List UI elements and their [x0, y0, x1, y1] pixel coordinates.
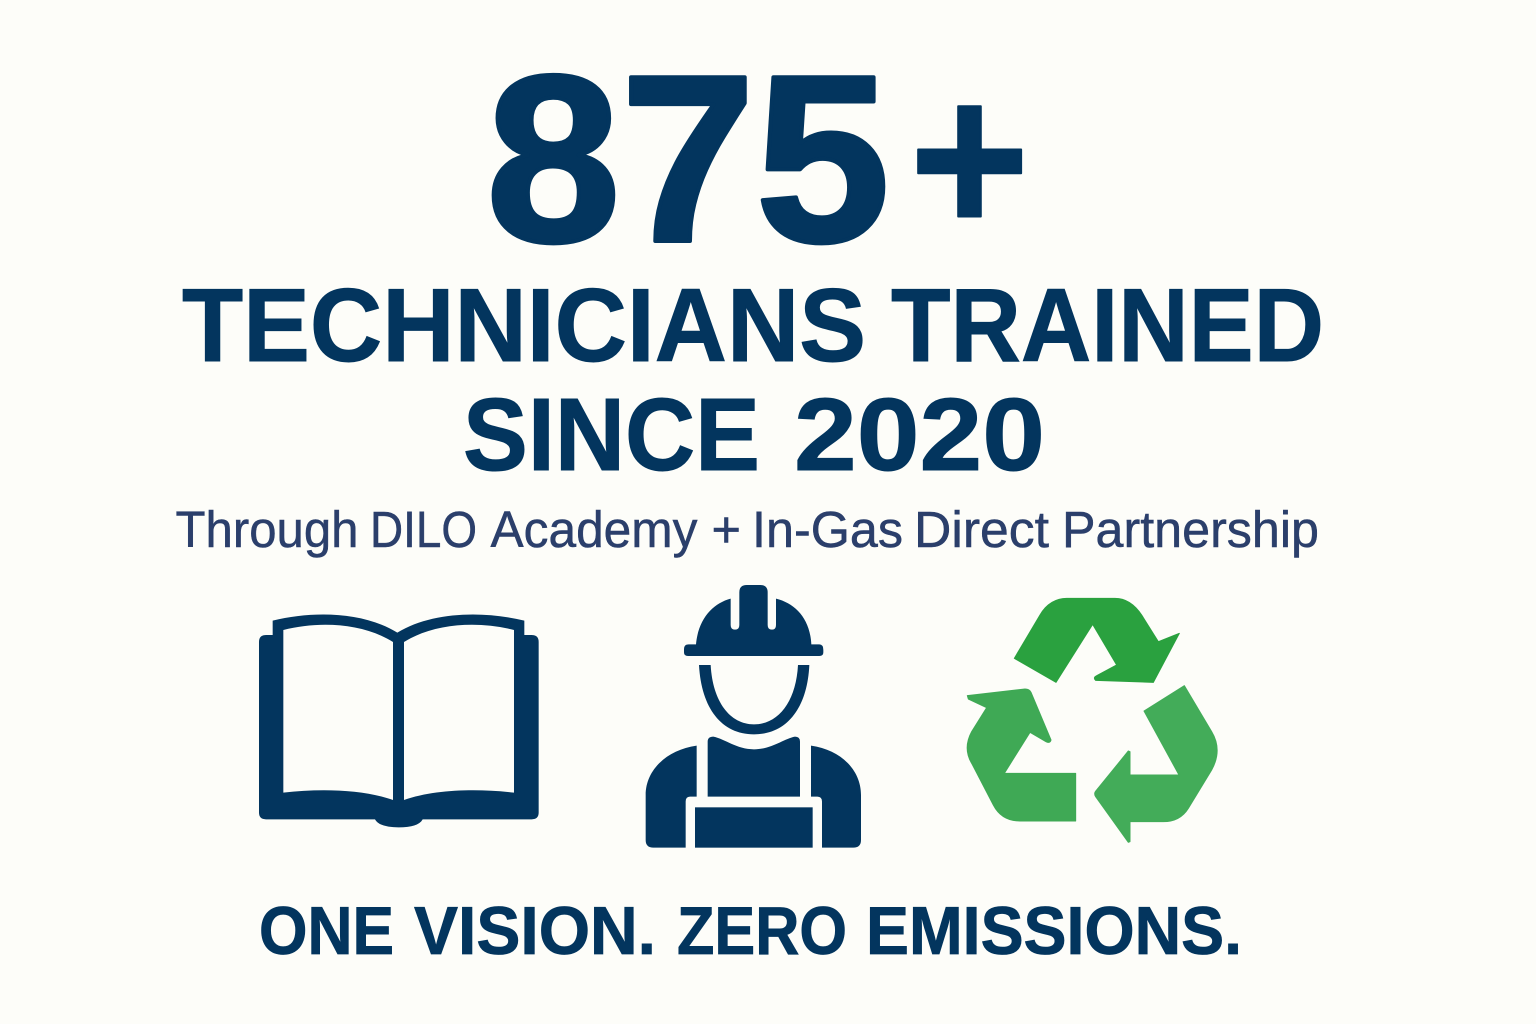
heading: technicians trained: TECHNICIANS: [182, 268, 866, 384]
face outline: [699, 665, 809, 734]
heading: since 2020: 2020: [794, 377, 1045, 492]
tagline: [259, 893, 1242, 969]
icon: open book: [259, 615, 539, 827]
overall bib: [708, 737, 800, 797]
tagline: EMISSIONS.: [866, 893, 1242, 969]
left arrow: [967, 689, 1076, 821]
right arrow: [1095, 686, 1217, 842]
subtitle: +: [712, 501, 741, 558]
heading: since 2020: [463, 377, 1045, 492]
subtitle: In-Gas: [752, 501, 903, 558]
subtitle: Partnership: [1062, 501, 1319, 558]
heading: technicians trained: TRAINED: [891, 268, 1324, 384]
subtitle: [176, 501, 1319, 558]
big number: 875+: 875: [486, 27, 890, 292]
subtitle: DILO: [370, 501, 477, 558]
subtitle: Academy: [490, 501, 698, 558]
heading: since 2020: SINCE: [463, 377, 760, 492]
left shoulder: [646, 746, 697, 848]
tagline: ZERO: [677, 893, 847, 969]
heading: technicians trained: [182, 268, 1324, 384]
icon: recycling arrows: [967, 598, 1217, 842]
tagline: ONE: [259, 893, 394, 969]
right shoulder: [811, 746, 861, 848]
overall pocket: [695, 807, 813, 848]
tagline: VISION.: [414, 893, 656, 969]
subtitle: Direct: [914, 501, 1049, 558]
hard hat: [684, 585, 823, 656]
icon: worker with hard hat: [646, 585, 861, 848]
big number: 875+: +: [910, 38, 1030, 280]
subtitle: Through: [176, 501, 358, 558]
top arrow: [1014, 598, 1179, 682]
